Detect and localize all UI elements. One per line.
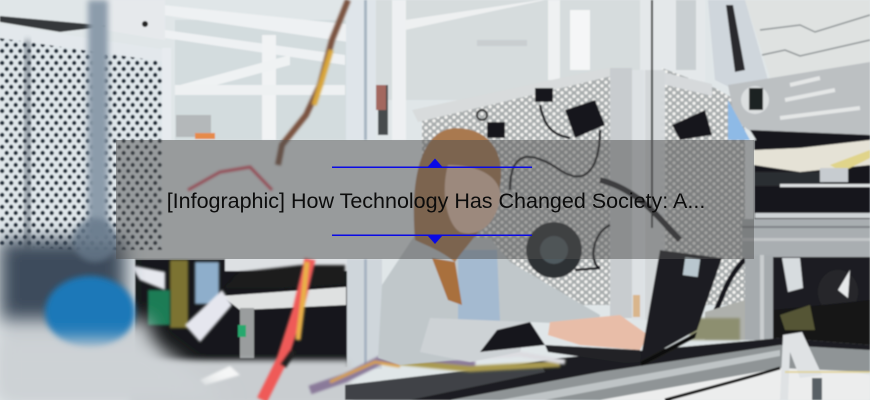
photo: right machine parts bbox=[708, 0, 870, 345]
photo: black laptop bbox=[545, 250, 722, 366]
title text: [Infographic] How Technology Has Changed Society: A... bbox=[167, 189, 705, 213]
top divider with up arrow bbox=[332, 158, 532, 168]
semi-transparent title banner bbox=[116, 140, 754, 259]
photo: lower left blurred foreground bbox=[0, 0, 350, 400]
bottom divider with down arrow bbox=[332, 234, 532, 244]
photo: cables and connectors on panel bbox=[477, 88, 712, 278]
photo: workbench rail and floor bbox=[345, 318, 870, 400]
photo: multicolor wires on bench bbox=[310, 354, 565, 390]
photo: woman at laptop bbox=[378, 128, 648, 365]
photo: center perforated panel bbox=[412, 67, 745, 340]
photo: left perforated cabinet bbox=[0, 0, 171, 250]
photo: colored cable bundle bbox=[188, 0, 348, 400]
